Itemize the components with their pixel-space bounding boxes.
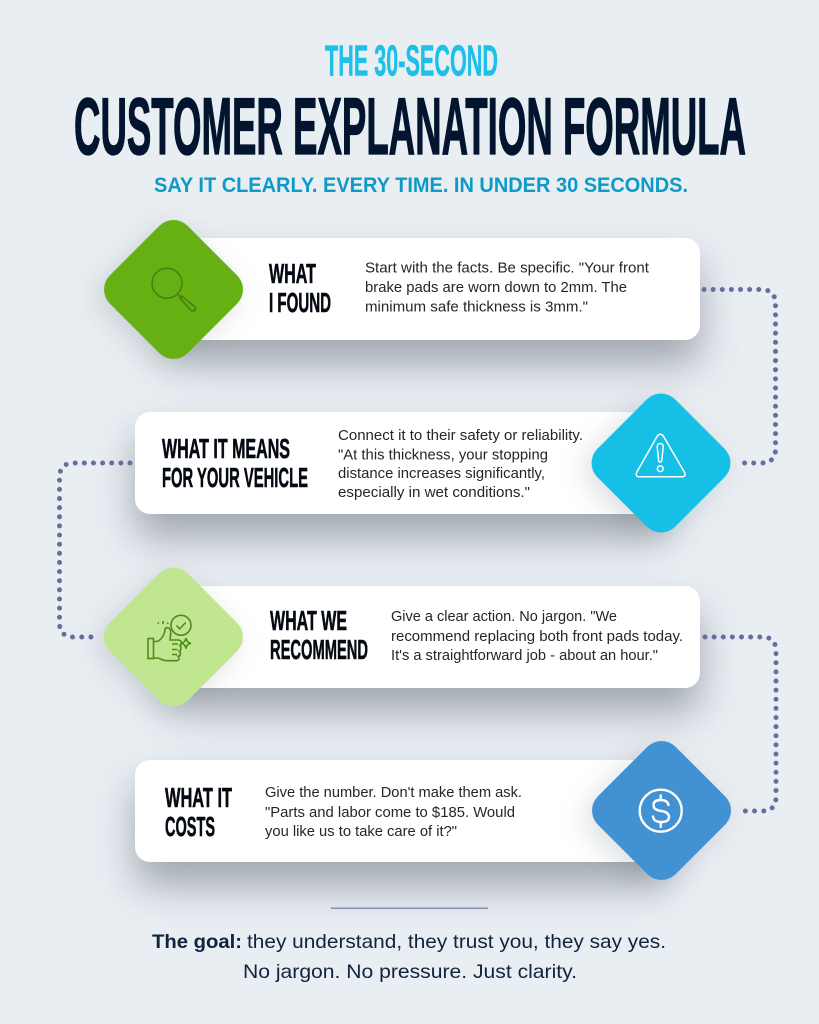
step 2 card: what it means <box>135 412 665 514</box>
diamond icon: dollar coin <box>584 733 739 888</box>
card background <box>135 412 665 514</box>
dotted connector: step 1 to step 2 <box>704 290 776 463</box>
step 4 text <box>265 785 522 840</box>
card background <box>170 238 700 340</box>
footer text: they understand, they trust you, they say yes. <box>247 931 666 953</box>
step 4 heading <box>165 782 232 842</box>
card background <box>170 586 700 688</box>
dotted connector: step 2 to step 3 <box>60 463 130 637</box>
step 1 text: Start with the facts. Be specific. "Your front <box>365 260 649 276</box>
diamond icon: thumbs up <box>96 559 251 715</box>
footer text: The goal: <box>152 931 242 953</box>
step 2 text <box>338 428 583 501</box>
step 3 text: It's a straightforward job - about an hour." <box>391 648 658 664</box>
footer divider <box>331 908 488 909</box>
footer text: No jargon. No pressure. Just clarity. <box>243 961 577 983</box>
step 4 card: what it costs <box>135 760 665 862</box>
diamond icon: warning triangle <box>583 385 739 541</box>
step 4 heading: WHAT IT <box>165 782 232 813</box>
step 2 heading: FOR YOUR VEHICLE <box>162 462 308 493</box>
step 3 heading: RECOMMEND <box>270 634 368 665</box>
step 3 heading: WHAT WE <box>270 605 347 636</box>
step 3 heading <box>270 605 368 665</box>
step 4 text: "Parts and labor come to $185. Would <box>265 805 515 821</box>
step 4 text: you like us to take care of it?" <box>265 824 457 840</box>
step 2 text: "At this thickness, your stopping <box>338 448 548 464</box>
subtitle: SAY IT CLEARLY. EVERY TIME. IN UNDER 30 SECONDS. <box>154 174 688 197</box>
step 1 text <box>365 260 649 316</box>
header: THE 30-SECOND <box>325 36 498 86</box>
step 1 heading: I FOUND <box>269 287 331 318</box>
step 3 text: Give a clear action. No jargon. "We <box>391 609 617 625</box>
step 3 text <box>391 609 683 664</box>
step 2 heading: WHAT IT MEANS <box>162 433 290 464</box>
footer text <box>152 931 666 983</box>
card background <box>135 760 665 862</box>
step 2 text: especially in wet conditions." <box>338 485 530 501</box>
step 1 text: brake pads are worn down to 2mm. The <box>365 280 627 296</box>
step 3 card: what we recommend <box>170 586 700 688</box>
step 1 card: what I found <box>170 238 700 340</box>
diamond icon: magnifying glass <box>96 212 251 367</box>
step 4 text: Give the number. Don't make them ask. <box>265 785 522 801</box>
step 1 heading <box>269 258 331 318</box>
dotted connector: step 3 to step 4 <box>705 637 776 811</box>
header <box>74 36 746 197</box>
step 4 heading: COSTS <box>165 811 215 842</box>
step 1 heading: WHAT <box>269 258 316 289</box>
step 2 heading <box>162 433 308 493</box>
step 2 text: Connect it to their safety or reliability. <box>338 428 583 444</box>
step 2 text: distance increases significantly, <box>338 466 545 482</box>
step 3 text: recommend replacing both front pads today. <box>391 629 683 645</box>
step 1 text: minimum safe thickness is 3mm." <box>365 300 588 316</box>
